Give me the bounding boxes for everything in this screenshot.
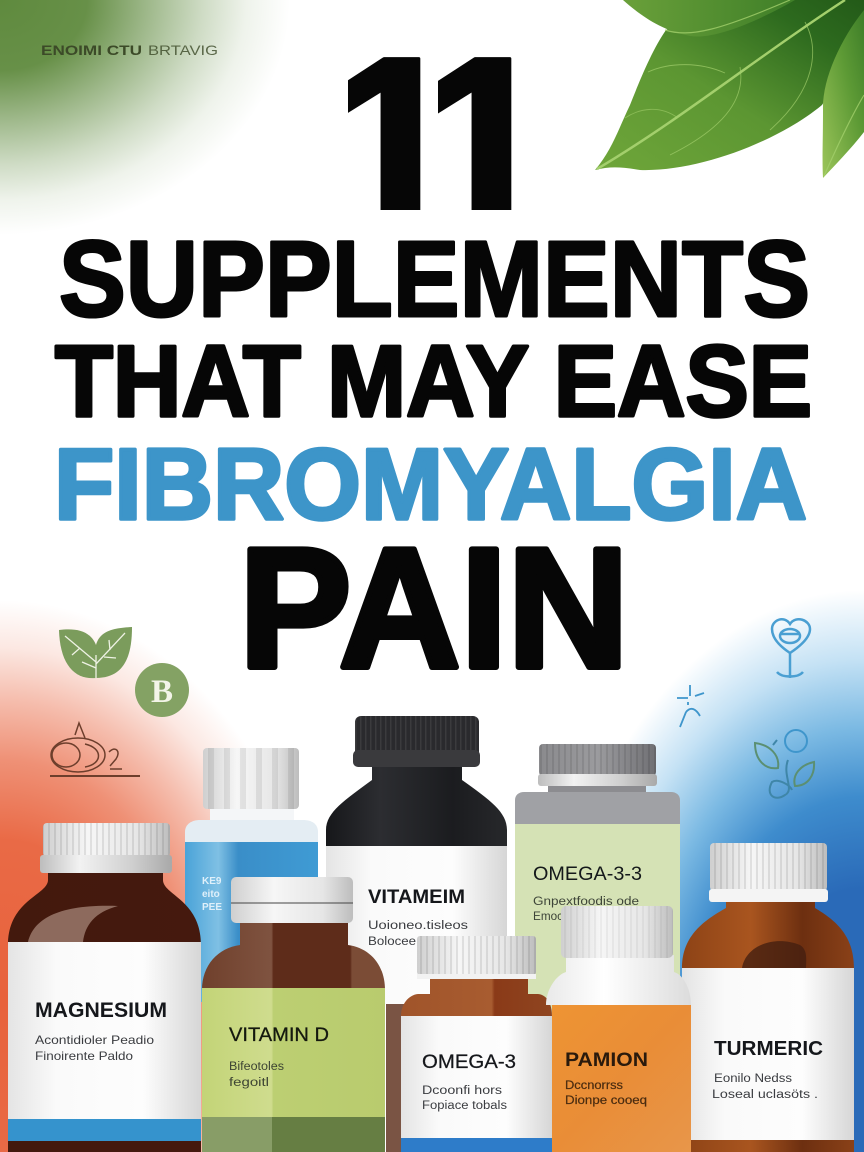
bottle: vitamin d bbox=[202, 877, 385, 1152]
bottle: omega-3 amber: Dcoonfi hors bbox=[422, 1085, 502, 1097]
bottle: vitamin black: VITAMEIM bbox=[368, 886, 465, 908]
bottle: omega-3-3 green: OMEGA-3-3 bbox=[533, 864, 642, 885]
bottle: omega-3 amber bbox=[401, 936, 552, 1152]
title bbox=[54, 0, 812, 704]
bottle: omega-3 amber: OMEGA-3 bbox=[422, 1052, 516, 1073]
brand line: BRTAVIG bbox=[148, 42, 218, 58]
bottle: vitamin black: Uoioneo.tisleos bbox=[368, 920, 468, 932]
bottle: vitamin d: Bifeotoles bbox=[229, 1061, 284, 1073]
bottle: omega-3-3 green: Emoc bbox=[533, 911, 563, 923]
bottle: pamion orange: Dccnorrss bbox=[565, 1080, 623, 1092]
bottle: magnesium bbox=[8, 823, 201, 1152]
bottle: omega-3-3 green: Gnpextfoodis ode bbox=[533, 896, 639, 908]
bottle: pamion orange bbox=[546, 906, 691, 1152]
bottle: blue: PEE bbox=[202, 902, 222, 913]
title: THAT MAY EASE bbox=[55, 326, 812, 438]
bottle: omega-3 amber: Fopiace tobals bbox=[422, 1100, 507, 1112]
icon: heart flower bbox=[772, 619, 810, 678]
bottle: turmeric: TURMERIC bbox=[714, 1038, 823, 1060]
bottle: vitamin black bbox=[326, 716, 507, 1152]
bottle: vitamin black: Bolocee bbox=[368, 936, 416, 948]
title: SUPPLEMENTS bbox=[59, 218, 810, 339]
bottle: turmeric bbox=[682, 843, 854, 1152]
bottle: turmeric: Loseal uclasöts . bbox=[712, 1089, 818, 1101]
bottle: magnesium: Finoirente Paldo bbox=[35, 1049, 133, 1063]
bottle: vitamin d: fegoitl bbox=[229, 1077, 269, 1089]
icon: green leaves top right bbox=[595, 0, 864, 178]
title: PAIN bbox=[239, 513, 629, 704]
icon: plant and berry bbox=[755, 730, 814, 798]
bottle: magnesium: Acontidioler Peadio bbox=[35, 1033, 154, 1047]
bottle: pamion orange: Dionpe cooeq bbox=[565, 1095, 647, 1107]
brand line: ENOIMI CTU bbox=[41, 42, 142, 58]
bottle: magnesium: MAGNESIUM bbox=[35, 999, 167, 1022]
title: FIBROMYALGIA bbox=[54, 429, 807, 541]
title: 11 bbox=[320, 0, 560, 300]
icon: nut outline bbox=[50, 723, 140, 776]
bottle: pamion orange: PAMION bbox=[565, 1050, 648, 1071]
bottle: blue: eito bbox=[202, 889, 220, 900]
bottle: vitamin d: VITAMIN D bbox=[229, 1024, 329, 1046]
brand line bbox=[41, 42, 218, 58]
bottle: turmeric: Eonilo Nedss bbox=[714, 1073, 792, 1085]
bottle: omega-3-3 green bbox=[515, 744, 680, 1014]
icon: sparkle bbox=[677, 685, 704, 727]
icon: B badge bbox=[135, 663, 189, 717]
icon: B badge: B bbox=[151, 674, 173, 710]
icon: leaf pair bbox=[59, 627, 132, 678]
bottle: blue bbox=[185, 748, 318, 1002]
bottle: blue: KE9 bbox=[202, 876, 222, 887]
